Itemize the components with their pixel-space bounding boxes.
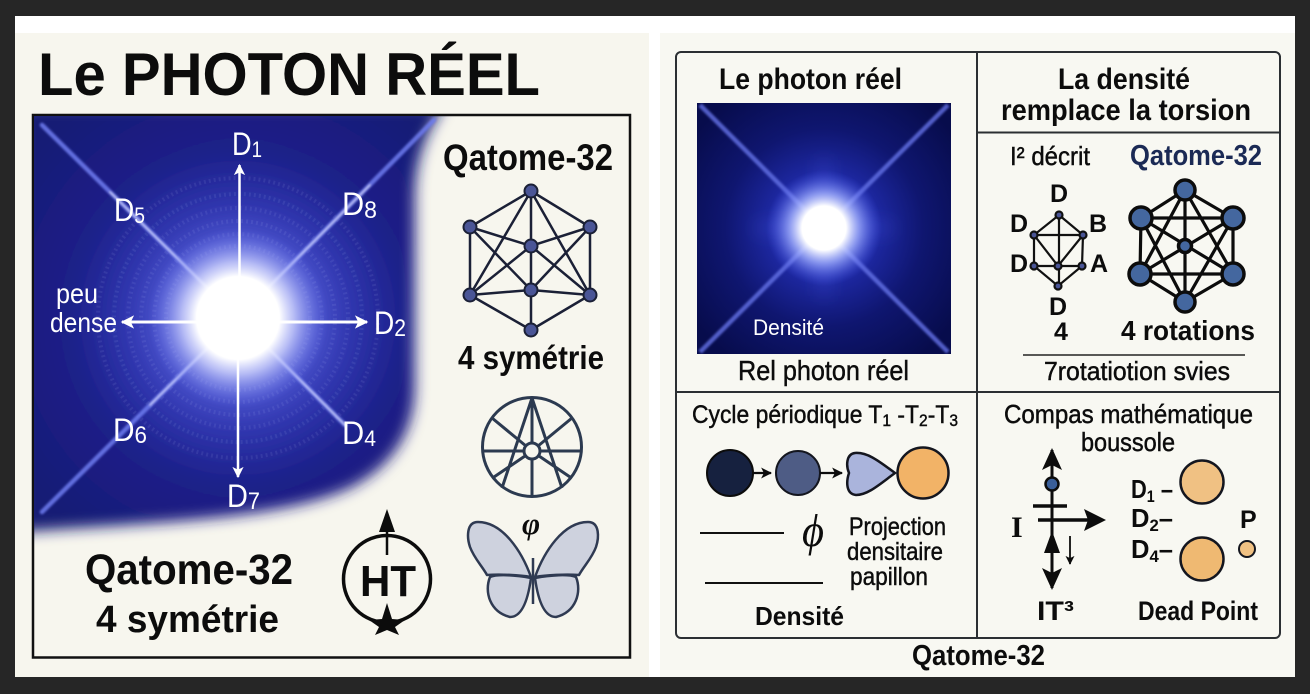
icon: large graph <box>1129 180 1244 312</box>
dot: D1 <box>1180 460 1224 504</box>
icon: small graph <box>1010 180 1108 346</box>
icon: small graph: D <box>1010 250 1028 278</box>
caption: 4 symétrie: 4 symétrie <box>96 599 279 641</box>
label: peu dense: peu <box>56 278 98 309</box>
heading: Qatome-32: Qatome-32 <box>443 137 613 178</box>
label: D6: 6 <box>135 422 147 449</box>
heading: la densité remplace la torsion: La densité <box>1058 63 1190 96</box>
title: Le PHOTON RÉEL <box>38 41 540 108</box>
panel: right grid <box>676 52 1280 638</box>
heading: cycle périodique: Cycle périodique T <box>692 401 900 429</box>
caption: Qatome-32: Qatome-32 <box>85 546 293 594</box>
image: photon square <box>697 103 951 354</box>
icon: circle star <box>482 398 582 497</box>
label: D4: 4 <box>1149 547 1159 566</box>
label: I² décrit: I² décrit <box>1010 141 1091 171</box>
caption: rel photon réel: Rel photon réel <box>738 355 909 386</box>
heading: le photon réel: Le photon réel <box>719 63 902 96</box>
label: peu dense: dense <box>50 307 117 338</box>
label: projection densitaire papillon: densitaire <box>847 538 943 566</box>
label: D5: 5 <box>134 203 145 228</box>
arrow: D7 <box>237 350 239 477</box>
label: P: P <box>1240 506 1257 534</box>
diagram: compass <box>1011 448 1106 590</box>
label: D4: 4 <box>364 426 376 451</box>
label: D2: 2 <box>394 315 406 342</box>
label: D1: 1 <box>252 137 262 162</box>
arrow: D2 <box>270 320 367 324</box>
cell: le photon réel <box>697 63 951 386</box>
diagram: compass: I <box>1011 511 1023 544</box>
heading: cycle périodique: -T <box>928 401 949 429</box>
label: D8: 8 <box>364 197 377 224</box>
label: densité: Densité <box>755 601 844 631</box>
label: D4: D <box>342 415 365 451</box>
heading: la densité remplace la torsion: remplace la torsion <box>1001 94 1251 127</box>
label: 4 rotations: 4 rotations <box>1121 315 1255 346</box>
label: projection densitaire papillon: papillon <box>850 563 928 591</box>
symbol: phi: ϕ <box>802 505 824 556</box>
label: Dead Point: Dead Point <box>1138 596 1258 626</box>
photon burst with eight directions <box>20 105 444 532</box>
cell: rotations <box>1010 140 1262 386</box>
label: phi: φ <box>522 506 540 541</box>
label: 7 rotatiotion svies: 7rotatiotion svies <box>1044 356 1230 386</box>
label: D7: D <box>227 478 250 514</box>
diagram: cycle sequence <box>707 448 948 498</box>
icon: HT circle <box>344 509 430 635</box>
heading: cycle périodique: 3 <box>949 411 958 430</box>
dot: D4 <box>1180 538 1224 580</box>
cell: cycle périodique <box>692 401 958 631</box>
label: D2: – <box>1159 503 1173 533</box>
label: D4: D <box>1131 534 1150 564</box>
label: D4: – <box>1159 534 1173 564</box>
label: D5: D <box>114 192 137 228</box>
label: Qatome-32: Qatome-32 <box>1130 140 1262 172</box>
heading: cycle périodique: -T <box>891 401 919 429</box>
heading: cycle périodique: 2 <box>919 411 928 430</box>
label: D6: D <box>113 412 136 448</box>
label: IT³: IT³ <box>1037 596 1074 626</box>
icon: butterfly <box>468 522 598 617</box>
label: D7: 7 <box>248 488 260 515</box>
icon: small graph: D <box>1049 293 1067 321</box>
heading: cycle périodique: 1 <box>882 411 891 430</box>
label: D2: D <box>374 305 397 341</box>
icon: small graph: D <box>1050 180 1068 208</box>
panel: le photon réel, left <box>20 105 630 658</box>
text: 4 symétrie: 4 symétrie <box>458 339 604 376</box>
icon: HT circle: HT <box>360 557 416 606</box>
label: D1: D <box>1131 474 1150 504</box>
icon: small graph: A <box>1090 250 1108 278</box>
icon: small graph: 4 <box>1054 318 1068 346</box>
cell: compas mathématique <box>1004 399 1258 626</box>
label: D1: 1 <box>1147 487 1155 506</box>
label: projection densitaire papillon: Projection <box>849 513 946 541</box>
image: photon square: Densité <box>753 315 824 340</box>
dot: P <box>1239 541 1255 557</box>
icon: small graph: D <box>1010 210 1028 238</box>
label: D2: 2 <box>1149 516 1159 535</box>
icon: small graph: B <box>1089 210 1107 238</box>
arrow: D1 <box>238 165 241 280</box>
label: D1: D <box>232 126 255 162</box>
label: D2: D <box>1131 503 1150 533</box>
label: D1: – <box>1155 474 1173 504</box>
heading: compas mathématique boussole: Compas mathématique <box>1004 399 1253 429</box>
icon: Qatome graph <box>464 184 596 336</box>
label: D8: D <box>342 186 365 222</box>
footer: Qatome-32: Qatome-32 <box>912 640 1045 672</box>
arrow: peu dense <box>122 320 205 324</box>
heading: compas mathématique boussole: boussole <box>1081 427 1175 457</box>
